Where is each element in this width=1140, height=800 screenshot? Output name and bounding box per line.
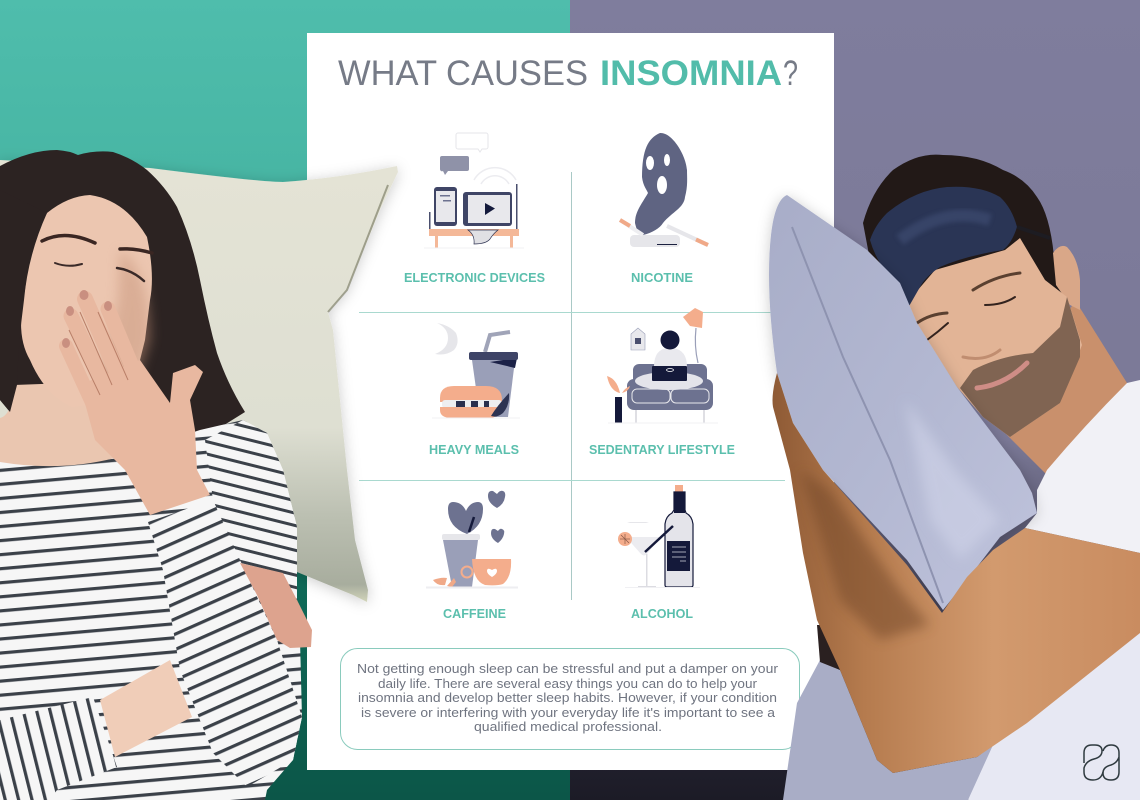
face shading bbox=[100, 250, 150, 400]
lower skin forearm bbox=[100, 660, 192, 757]
pillow edge shadow bbox=[328, 185, 388, 312]
pillow behind woman bbox=[0, 160, 398, 602]
hair bbox=[863, 155, 1066, 300]
callout: closing advice: Not getting enough sleep can be stressful and put a damper on your bbox=[357, 662, 778, 676]
title: INSOMNIA bbox=[600, 54, 782, 93]
icon: heavy meals bbox=[432, 323, 520, 418]
hair bbox=[0, 150, 245, 455]
background: purple right half bbox=[570, 0, 1140, 800]
icon: caffeine bbox=[426, 491, 518, 588]
icon: sedentary lifestyle bbox=[607, 308, 718, 423]
pillow seam bbox=[792, 227, 943, 603]
callout: closing advice: insomnia and develop better sleep habits. However, if your condition bbox=[358, 691, 777, 705]
title: ? bbox=[783, 54, 798, 93]
striped shirt body bbox=[0, 420, 302, 800]
wrist sleeve bbox=[0, 697, 117, 800]
crossed forearm sleeve bbox=[148, 500, 302, 787]
icon: electronic devices bbox=[424, 133, 524, 248]
photo: yawning woman with pillow bbox=[0, 150, 398, 800]
hand on arm bbox=[240, 563, 312, 648]
hand over mouth bbox=[62, 290, 210, 515]
background: teal left half bbox=[0, 0, 570, 800]
photo: sleeping man hugging pillow bbox=[769, 155, 1140, 800]
face bbox=[905, 238, 1082, 437]
lower pillow bbox=[783, 660, 993, 800]
forearm hair texture bbox=[800, 470, 930, 640]
icon: nicotine bbox=[620, 133, 708, 247]
label: heavy meals: HEAVY MEALS bbox=[429, 442, 519, 457]
upper arm sleeve bbox=[205, 420, 297, 600]
left hair strand bbox=[0, 190, 47, 412]
beard bbox=[960, 297, 1080, 437]
sleep mask bbox=[870, 187, 1017, 308]
arm bbox=[772, 373, 1140, 773]
man's shirt bbox=[1025, 380, 1140, 553]
icon: alcohol bbox=[618, 485, 700, 588]
brows and eyes bbox=[42, 235, 152, 281]
brows, eyes and mouth bbox=[917, 273, 1027, 388]
callout: closing advice: is severe or interfering with your everyday life it's important to see a bbox=[361, 706, 775, 720]
ear bbox=[1053, 246, 1080, 310]
man's neck bbox=[1005, 300, 1127, 475]
pillow sheen bbox=[905, 400, 1000, 560]
label: electronic devices: ELECTRONIC DEVICES bbox=[404, 270, 545, 285]
callout: closing advice: qualified medical professional. bbox=[474, 720, 662, 734]
logo bbox=[1084, 745, 1119, 780]
shadow behind arm bbox=[817, 625, 840, 670]
panel: white poster card bbox=[307, 33, 834, 770]
face bbox=[21, 195, 152, 407]
callout: closing advice: daily life. There are several easy things you can do to help your bbox=[378, 677, 757, 691]
label: nicotine: NICOTINE bbox=[631, 270, 693, 285]
title: WHAT CAUSES bbox=[338, 54, 588, 93]
neck bbox=[0, 380, 175, 470]
grid lines between causes bbox=[359, 172, 785, 600]
label: alcohol: ALCOHOL bbox=[631, 606, 693, 621]
label: caffeine: CAFFEINE bbox=[443, 606, 506, 621]
label: sedentary lifestyle: SEDENTARY LIFESTYLE bbox=[589, 442, 735, 457]
callout: closing advice bbox=[340, 648, 800, 750]
lower body shirt bbox=[968, 620, 1140, 800]
pillow bbox=[769, 195, 1037, 610]
